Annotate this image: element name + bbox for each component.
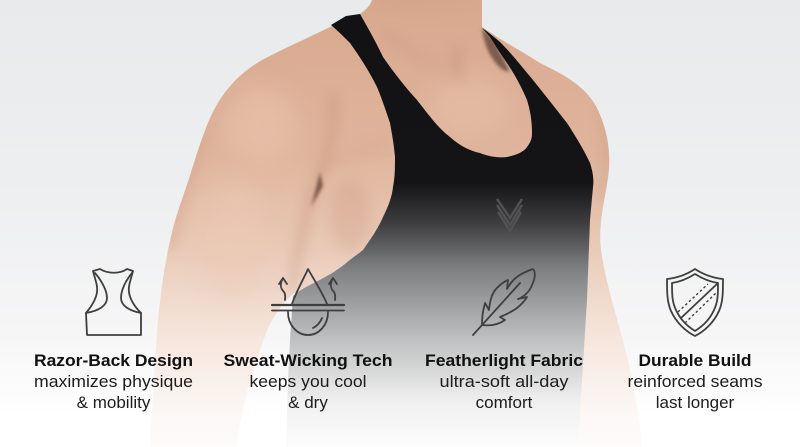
feature: sweat-wicking tech <box>224 269 392 412</box>
feature: razor-back design <box>34 269 193 412</box>
body: arms, shoulders and chest <box>150 0 642 447</box>
heading: Razor-Back Design <box>34 351 193 370</box>
icon: racerback tank <box>86 269 141 335</box>
tank top logo <box>497 199 522 231</box>
icon: shield with seams <box>667 269 723 336</box>
heading: Durable Build <box>638 351 752 370</box>
heading: Featherlight Fabric <box>425 351 583 370</box>
description: keeps you cool <box>250 372 366 391</box>
feature: durable build: last longer <box>656 393 735 412</box>
black tank top <box>286 14 593 447</box>
feature: featherlight fabric <box>425 269 583 412</box>
photo: athlete wearing tank top <box>150 0 642 447</box>
feature: sweat-wicking tech: & dry <box>288 393 328 412</box>
description: maximizes physique <box>34 372 193 391</box>
description: ultra-soft all-day <box>440 372 569 391</box>
feature: featherlight fabric: comfort <box>476 393 533 412</box>
feature: durable build <box>628 269 762 412</box>
heading: Sweat-Wicking Tech <box>224 351 392 370</box>
feature: razor-back design: & mobility <box>77 393 151 412</box>
muscle shading <box>169 28 605 292</box>
description: reinforced seams <box>628 372 762 391</box>
icon: water drop through fabric <box>272 269 344 335</box>
icon: feather <box>473 269 535 335</box>
